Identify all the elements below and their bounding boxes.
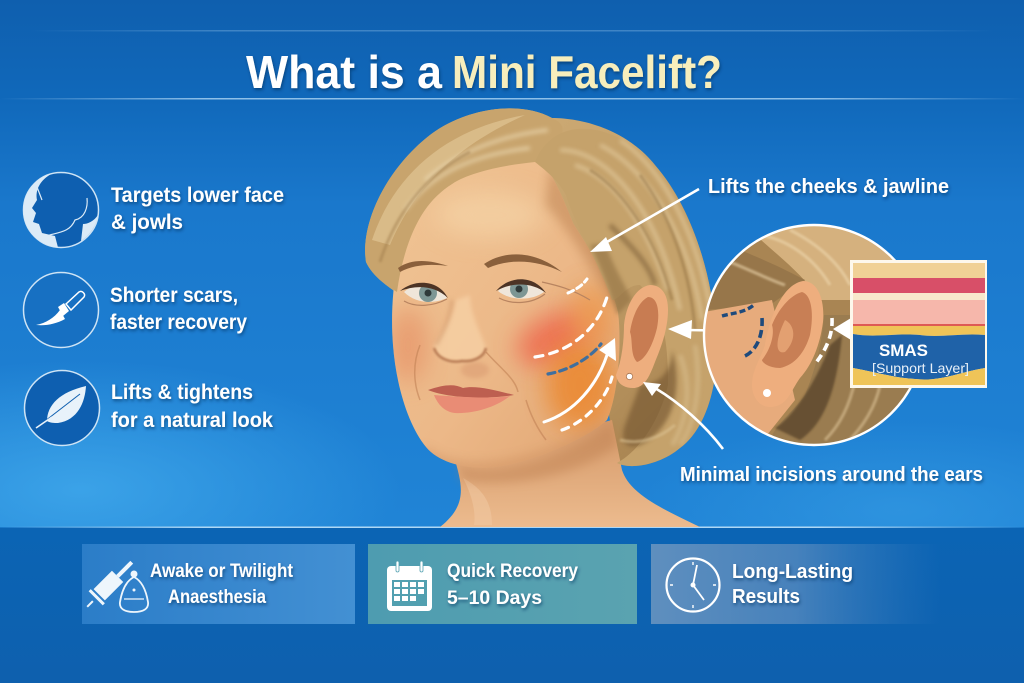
hair front right [535, 129, 717, 466]
text: lifts and tightens: for a natural look [111, 409, 273, 432]
hair front left [365, 108, 563, 292]
label: SMAS: SMAS [879, 341, 928, 360]
icon: syringe and mask [80, 555, 148, 614]
benefit list [23, 172, 284, 446]
arrow: to cheeks [590, 189, 699, 252]
nose [434, 295, 486, 362]
neck [440, 420, 700, 527]
layer: pale band [853, 293, 985, 300]
text: targets lower face [111, 184, 284, 234]
incision marks [722, 304, 755, 316]
title [246, 46, 722, 98]
portrait of woman [365, 108, 717, 527]
ear large [774, 281, 824, 390]
label: support layer: [Support Layer] [872, 360, 969, 376]
eyes [400, 279, 590, 305]
text: long-lasting results: Long-Lasting [732, 561, 853, 583]
benefit: lifts and tightens [24, 370, 273, 446]
ear close-up circle [702, 224, 912, 446]
text: quick recovery: Quick Recovery [447, 561, 578, 582]
layer: SMAS blue [853, 334, 985, 380]
layer: dermis red [853, 278, 985, 293]
icon: calendar [387, 561, 432, 611]
text: long-lasting results: Results [732, 586, 800, 608]
panel: long-lasting results [651, 544, 941, 624]
skin [705, 300, 795, 434]
arrow: to ear [668, 320, 748, 339]
panel: anaesthesia [80, 544, 355, 624]
icon: scalpel [24, 272, 98, 348]
benefit: shorter scars [24, 272, 247, 348]
icon: clock [666, 558, 720, 612]
text: targets lower face: & jowls [111, 211, 183, 234]
lips [428, 385, 514, 413]
dashed lift lines [535, 279, 612, 430]
text: anaesthesia: Awake or Twilight [150, 561, 294, 582]
shadow hair under ear [623, 350, 677, 446]
text: quick recovery [447, 561, 578, 609]
hair back [365, 108, 717, 466]
lower hair [772, 315, 908, 444]
text: shorter scars: Shorter scars, [110, 284, 238, 307]
panel: quick recovery [368, 544, 637, 624]
inset: skin layers [850, 260, 987, 388]
icon: feather [24, 370, 100, 446]
text: anaesthesia [150, 561, 294, 608]
arrow: to incisions [643, 382, 723, 449]
ear [616, 285, 668, 388]
arrow: to SMAS inset [833, 318, 851, 340]
face shading [392, 172, 620, 468]
layer: fat top [853, 263, 985, 279]
title: Mini Facelift? [452, 46, 722, 98]
face [392, 160, 620, 468]
smile lines [415, 345, 546, 440]
callout: minimal incisions: Minimal incisions around the ears [680, 464, 983, 486]
icon: head profile [23, 172, 99, 248]
text: lifts and tightens: Lifts & tightens [111, 381, 253, 404]
layer: yellow fat [853, 326, 985, 336]
text: long-lasting results [732, 561, 853, 608]
arrow: curved cheek lift [544, 338, 616, 422]
eyebrows [398, 261, 448, 272]
text: shorter scars: faster recovery [110, 311, 247, 334]
benefit: targets lower face [23, 172, 284, 248]
layer: yellow fat bottom [853, 368, 985, 385]
text: lifts and tightens [111, 381, 273, 432]
text: anaesthesia: Anaesthesia [168, 587, 266, 608]
callout: cheeks and jawline: Lifts the cheeks & jawline [708, 176, 949, 198]
text: quick recovery: 5–10 Days [447, 588, 542, 609]
title: What is a [246, 46, 442, 98]
layer: pink tissue [853, 300, 985, 325]
text: targets lower face: Targets lower face [111, 184, 284, 207]
text: shorter scars [110, 284, 247, 334]
